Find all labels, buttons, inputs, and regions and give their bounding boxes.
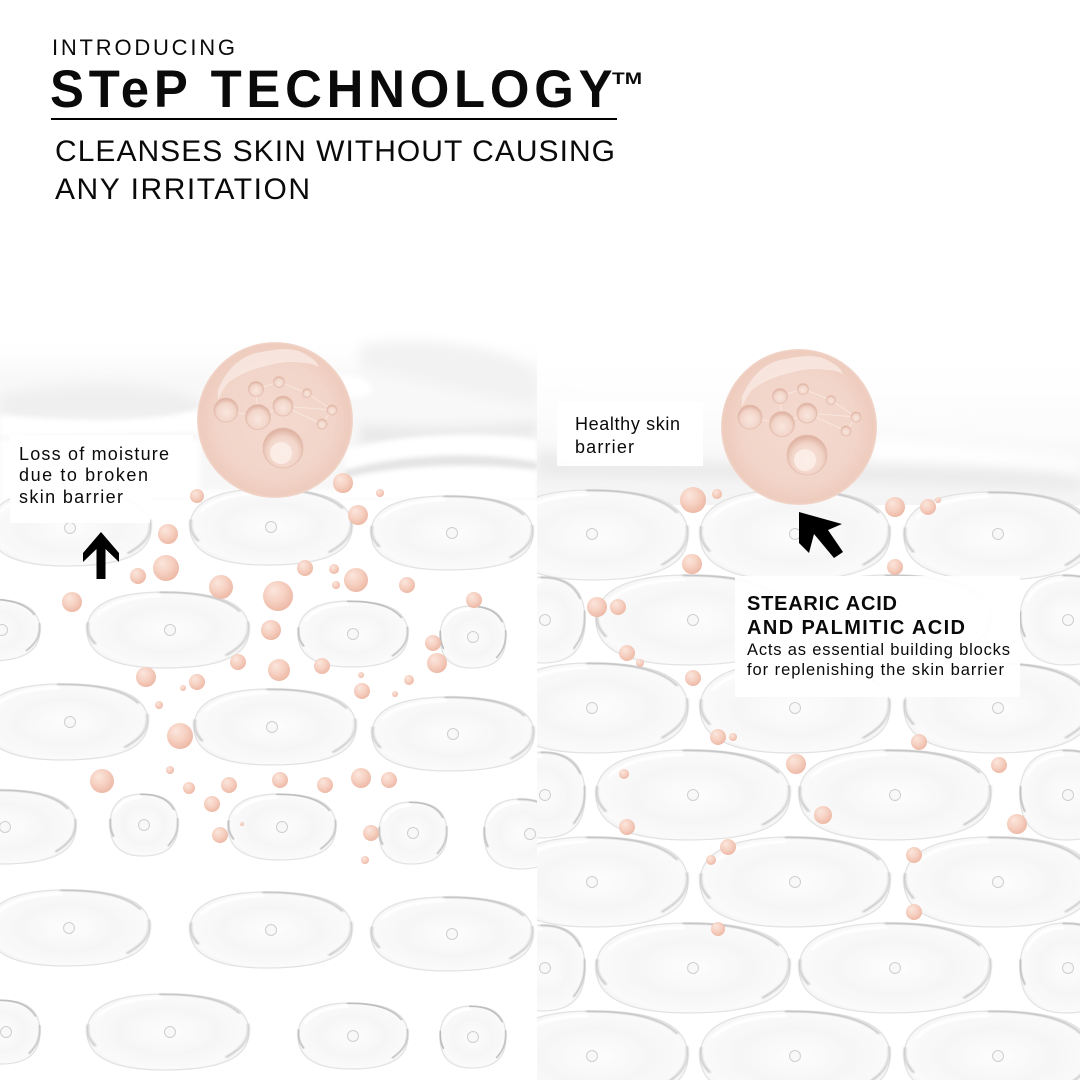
droplets: right (587, 487, 1027, 936)
callout: stearic and palmitic acid: AND PALMITIC ACID (747, 617, 965, 639)
callout: loss of moisture: Loss of moisture (19, 444, 169, 464)
skin cells: right (504, 490, 1080, 1080)
callout: healthy skin barrier (557, 416, 703, 466)
droplets: left (62, 473, 482, 864)
callout: stearic and palmitic acid (735, 576, 1020, 697)
subtitle: ANY IRRITATION (55, 173, 310, 206)
callout: healthy skin barrier: Healthy skin (575, 414, 680, 434)
trademark: TM (612, 69, 642, 88)
subtitle (55, 135, 615, 206)
subtitle: CLEANSES SKIN WITHOUT CAUSING (55, 135, 615, 168)
callout: loss of moisture (10, 446, 168, 523)
callout: loss of moisture: due to broken (19, 465, 148, 485)
callout: stearic and palmitic acid: STEARIC ACID (747, 593, 897, 615)
callout: stearic and palmitic acid: for replenishing the skin barrier (747, 661, 1004, 679)
cream layer: left (0, 343, 537, 478)
panel: healthy skin barrier (504, 345, 1080, 1080)
skin cells: left (0, 489, 560, 1070)
arrow: diagonal up-left (799, 512, 843, 558)
sphere: left (197, 342, 353, 498)
callout: healthy skin barrier: barrier (575, 437, 634, 457)
sphere: right (721, 349, 877, 505)
header block (50, 35, 642, 206)
title: STeP TECHNOLOGY (50, 60, 613, 119)
cream layer: right (537, 446, 1080, 505)
callout: stearic and palmitic acid: Acts as essential building blocks (747, 641, 1010, 659)
panel: broken skin barrier (0, 335, 560, 1070)
arrow: up (83, 532, 119, 579)
title rule (51, 118, 617, 120)
callout: loss of moisture: skin barrier (19, 487, 123, 507)
eyebrow: introducing: INTRODUCING (52, 35, 235, 60)
